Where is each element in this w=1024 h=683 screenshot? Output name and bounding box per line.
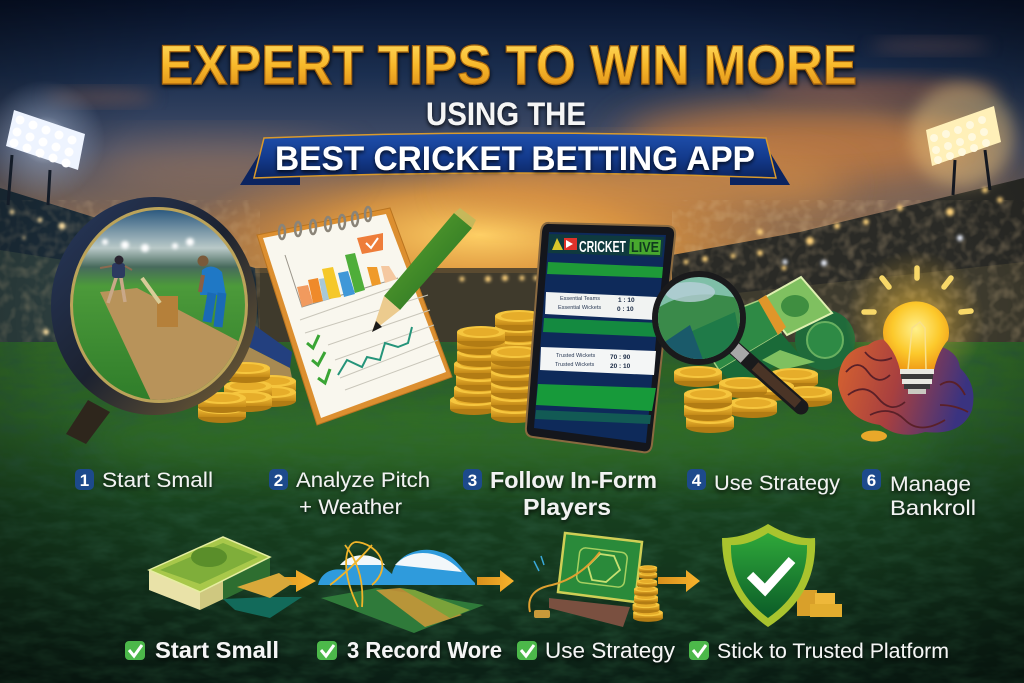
arrow 3 <box>658 570 700 592</box>
step 6 label <box>862 469 976 520</box>
pencil <box>372 208 476 332</box>
arrow 2 <box>477 570 514 592</box>
step 2 label: 2 <box>274 471 283 490</box>
icon: smartphone with cricket live app: Essential Teams <box>560 296 600 302</box>
step 1 label: Start Small <box>102 469 213 492</box>
arrow 1 <box>262 570 316 592</box>
icon: smartphone with cricket live app: 20 : 10 <box>610 363 631 370</box>
app header: CRICKET <box>579 239 626 256</box>
ruled lines <box>300 278 440 390</box>
bar chart on notepad <box>285 253 398 307</box>
icon: coin stack by magnifier <box>198 362 296 423</box>
icon: light bulb on brain <box>838 250 985 442</box>
floodlight left <box>0 80 105 205</box>
step 3 label: 3 <box>468 471 477 490</box>
step 4 label: Use Strategy <box>714 472 841 495</box>
icon: notepad with chart and pencil <box>257 207 476 425</box>
icon: coins right of phone <box>674 366 832 433</box>
distant stand centre <box>240 268 560 344</box>
stadium sky background <box>0 0 1024 320</box>
app rows <box>535 262 663 424</box>
icon: cash bundle <box>149 537 302 618</box>
icon: shield with check mark <box>722 524 815 627</box>
step 2 label: + Weather <box>299 496 402 519</box>
check item: stick to trusted platform: Stick to Trusted Platform <box>717 640 949 663</box>
icon: magnifying glass over cricket pitch <box>51 197 257 444</box>
icon: smartphone with cricket live app: 0 : 10 <box>617 306 634 313</box>
step 4 label <box>687 469 841 495</box>
step 6 label: Manage <box>890 473 971 496</box>
icon: gold bars by shield <box>797 590 842 617</box>
check item: record wore: 3 Record Wore <box>347 637 502 663</box>
step 6 label: 6 <box>867 471 876 490</box>
stadium stands right <box>672 178 1024 345</box>
check item: use strategy: Use Strategy <box>545 638 675 663</box>
grass field <box>0 342 1024 683</box>
icon: smartphone with cricket live app: 1 : 10 <box>618 297 635 304</box>
step 3 label: Follow In-Form <box>490 467 657 493</box>
icon: smartphone with cricket live app: 70 : 90 <box>610 354 631 361</box>
floodlight right <box>910 83 1014 195</box>
step 1 label: 1 <box>80 471 89 490</box>
step 6 label: Bankroll <box>890 497 976 520</box>
icon: centre coin stacks <box>450 310 543 423</box>
icon: smartphone with cricket live app <box>526 223 675 452</box>
stadium stands left <box>0 188 260 345</box>
step 3 label <box>463 467 657 520</box>
icon: cloud over pitch <box>318 542 484 633</box>
icon: strategy board, bat and coins <box>529 533 663 627</box>
step 4 label: 4 <box>692 471 702 490</box>
icon: magnifying glass over cash <box>652 271 801 407</box>
banner: best cricket betting app: BEST CRICKET BETTING APP <box>275 140 755 178</box>
check item: start small: Start Small <box>155 637 279 663</box>
step 3 label: Players <box>523 494 611 520</box>
banner: best cricket betting app <box>240 133 790 185</box>
checklist ticks <box>307 335 330 383</box>
icon: blue strip and pitch behind magnifier <box>240 322 292 378</box>
icon: smartphone with cricket live app: Trusted Wickets <box>555 362 594 368</box>
app header: LIVE <box>631 239 659 256</box>
step 2 label <box>269 469 430 519</box>
line chart <box>338 327 412 375</box>
app header <box>548 234 664 257</box>
title: expert tips to win more: EXPERT TIPS TO WIN MORE <box>159 33 857 96</box>
orange tick badge <box>357 233 383 254</box>
icon: smartphone with cricket live app: Trusted Wickets <box>556 353 595 359</box>
icon: smartphone with cricket live app: Essential Wickets <box>558 305 601 311</box>
step 2 label: Analyze Pitch <box>296 469 430 492</box>
subtitle: using the: USING THE <box>426 96 586 132</box>
icon: cash stack behind magnifier <box>691 277 855 385</box>
